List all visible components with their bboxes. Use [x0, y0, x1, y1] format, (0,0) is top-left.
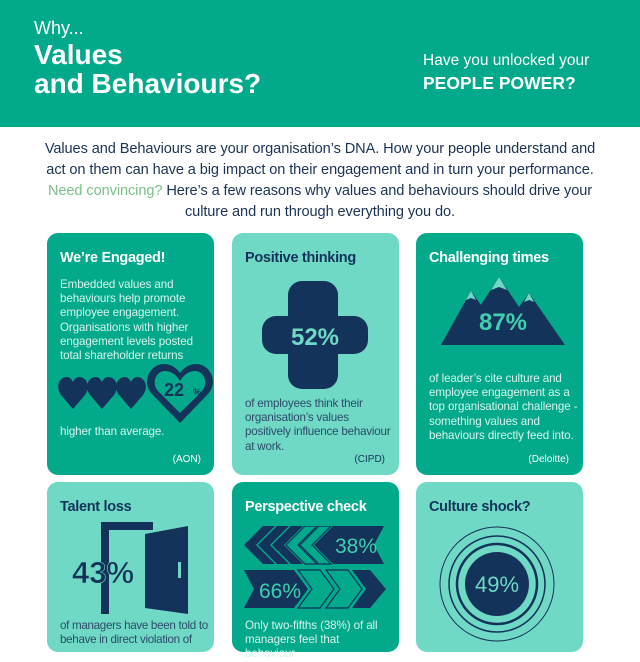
icon: hearts: 22 — [164, 380, 184, 400]
icon: hearts — [58, 364, 213, 423]
tagline — [423, 52, 590, 93]
icon: door with 43%: 43% — [72, 555, 134, 590]
panel: Positive thinking — [232, 233, 399, 475]
heading: Perspective check — [245, 499, 366, 515]
tagline: Have you unlocked your — [423, 52, 589, 69]
chart: chevrons: 38% — [335, 535, 377, 558]
icon: cross with 52%: 52% — [291, 324, 339, 351]
text block: of leader’s cite culture and employee engagement as a top organisational challenge - something values and behaviours directly feed into. — [429, 372, 577, 442]
icon: cross with 52% — [262, 281, 368, 389]
text block: of managers have been told to behave in direct violation of — [60, 619, 208, 646]
title: Why... — [34, 18, 84, 38]
icon: mountains with 87%: 87% — [479, 309, 527, 336]
icon: hearts: % — [193, 387, 201, 397]
icon: door with 43% — [72, 522, 188, 614]
tagline: PEOPLE POWER? — [423, 73, 576, 93]
icon: concentric circles with 49% — [440, 526, 554, 642]
source: (AON) — [173, 454, 201, 465]
title — [34, 18, 261, 99]
panel: We're Engaged — [47, 233, 214, 475]
heading: Challenging times — [429, 250, 549, 266]
panel: Culture shock — [416, 482, 583, 652]
panel: Challenging times — [416, 233, 583, 475]
panel: Talent loss — [47, 482, 214, 652]
source: (CIPD) — [354, 454, 385, 465]
text block: Only two-fifths (38%) of all managers feel that behaviour — [245, 619, 378, 660]
chart: chevrons — [244, 526, 386, 609]
title: and Behaviours? — [34, 68, 261, 99]
source: (Deloitte) — [528, 454, 569, 465]
text block: of employees think their organisation’s values positively influence behaviour at work. — [245, 397, 390, 453]
heading: Talent loss — [60, 499, 131, 515]
chart: chevrons: 66% — [259, 580, 301, 603]
panel: Perspective check — [232, 482, 399, 652]
header band — [0, 0, 640, 127]
heading: We’re Engaged! — [60, 250, 165, 266]
icon: concentric circles with 49%: 49% — [475, 572, 519, 597]
text block: Embedded values and behaviours help promote employee engagement. Organisations with higher engagement levels posted total shareholder returns — [60, 278, 193, 362]
heading: Positive thinking — [245, 250, 356, 266]
icon: mountains with 87% — [441, 277, 565, 345]
heading: Culture shock? — [429, 499, 530, 515]
intro text: Values and Behaviours are your organisation’s DNA. How your people understand and act on them can have a big impact on their engagement and in turn your performance. Need convincing? Here’s a few reasons why values and behaviours should drive your culture and run through everything you do. — [45, 141, 595, 220]
text block: higher than average. — [60, 425, 164, 438]
title: Values — [34, 39, 123, 70]
